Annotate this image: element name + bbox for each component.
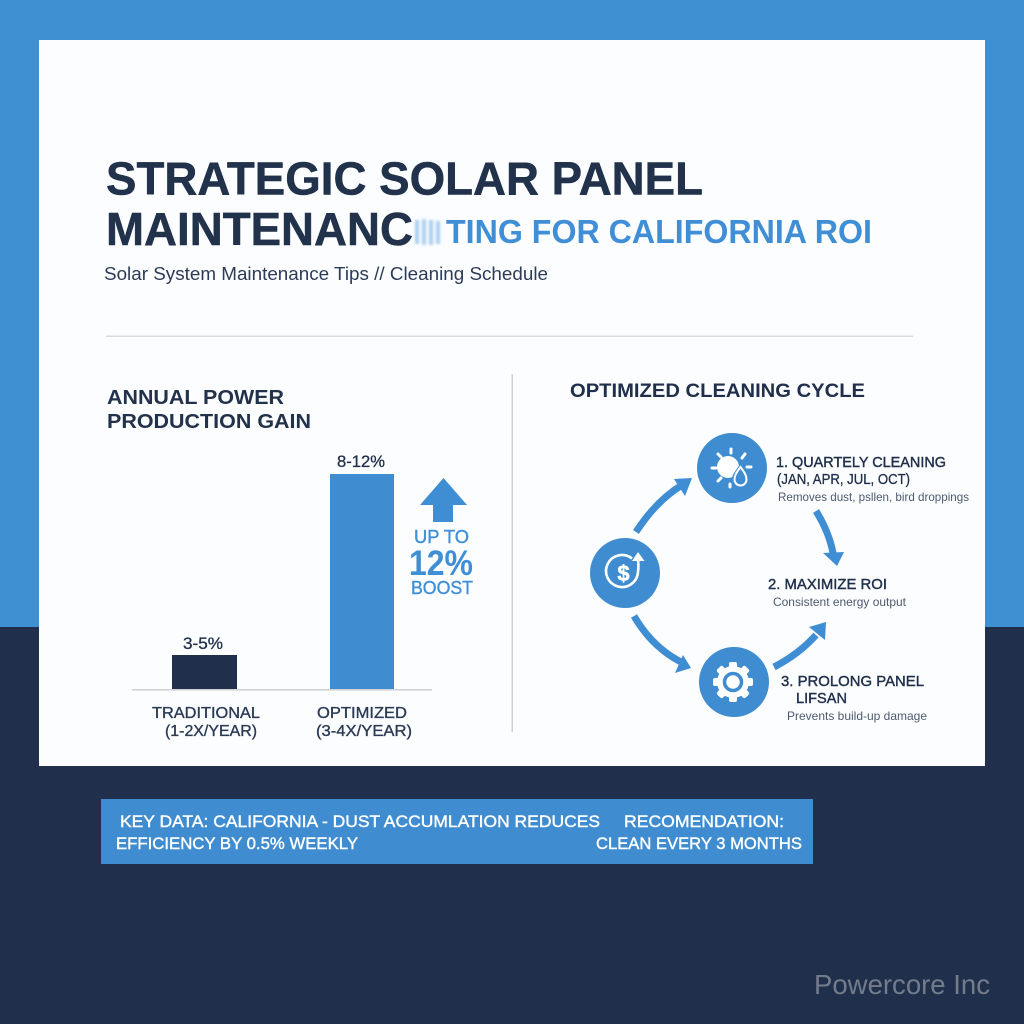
- text: step 1 quarterly cleaning: Removes dust, psllen, bird droppings: [778, 490, 969, 504]
- text: step 1 quarterly cleaning: 1. QUARTELY CLEANING: [776, 455, 946, 471]
- title: [106, 152, 872, 255]
- node: dollar growth: $: [617, 561, 630, 586]
- panel: optimized cleaning cycle: [570, 380, 969, 723]
- panel: white main card: [39, 40, 985, 766]
- callout: key data banner: [101, 799, 813, 864]
- value: 8-12%: 8-12%: [337, 452, 385, 471]
- node: dollar growth: [590, 538, 660, 608]
- node: sun and water drop: [697, 433, 767, 503]
- text: step 2 maximize ROI: Consistent energy output: [773, 595, 907, 609]
- panel: annual power production gain chart: [107, 387, 473, 740]
- text: recommendation: CLEAN EVERY 3 MONTHS: [596, 834, 802, 853]
- subtitle: Solar System Maintenance Tips // Cleaning Schedule: [104, 263, 548, 284]
- arrow: cleaning to ROI: [816, 511, 844, 566]
- arrow: money to lifespan: [634, 616, 691, 673]
- text: step 3 prolong panel lifespan: LIFSAN: [796, 691, 847, 707]
- axis label: traditional: (1-2X/YEAR): [165, 723, 257, 740]
- axis label: optimized: [316, 705, 412, 740]
- text: step 2 maximize ROI: [768, 577, 907, 609]
- axis label: optimized: OPTIMIZED: [317, 705, 407, 722]
- heading: annual power production gain: PRODUCTION GAIN: [107, 411, 311, 433]
- axis label: traditional: TRADITIONAL: [152, 705, 260, 722]
- title: STRATEGIC SOLAR PANEL: [106, 152, 703, 204]
- axis label: optimized: (3-4X/YEAR): [316, 723, 412, 740]
- text: step 2 maximize ROI: 2. MAXIMIZE ROI: [768, 577, 887, 593]
- callout: up to 12% boost: 12%: [409, 544, 473, 583]
- callout: up to 12% boost: BOOST: [411, 577, 473, 598]
- text: step 3 prolong panel lifespan: 3. PROLONG PANEL: [781, 674, 924, 690]
- bar: traditional: [172, 655, 237, 689]
- text: step 3 prolong panel lifespan: Prevents build-up damage: [787, 709, 927, 723]
- callout: up to 12% boost: UP TO: [414, 526, 469, 547]
- heading: optimized cleaning cycle: OPTIMIZED CLEANING CYCLE: [570, 380, 865, 402]
- callout: up to 12% boost: [409, 526, 473, 598]
- bar: optimized: [330, 474, 394, 689]
- text: step 1 quarterly cleaning: [776, 455, 969, 504]
- node: gear: [699, 647, 769, 717]
- text: recommendation: RECOMENDATION:: [624, 812, 784, 831]
- arrow: lifespan to ROI: [774, 622, 826, 667]
- icon: up arrow: [420, 478, 467, 522]
- arrow: money to cleaning: [636, 478, 692, 532]
- title: TING FOR CALIFORNIA ROI: [446, 213, 872, 250]
- heading: annual power production gain: [107, 387, 311, 433]
- title: MAINTENANC: [106, 203, 413, 255]
- watermark: Powercore Inc: Powercore Inc: [814, 969, 990, 1000]
- text: key data: EFFICIENCY BY 0.5% WEEKLY: [116, 834, 358, 853]
- heading: annual power production gain: ANNUAL POWER: [107, 387, 285, 409]
- text: key data: KEY DATA: CALIFORNIA - DUST ACCUMLATION REDUCES: [120, 812, 600, 831]
- text: step 3 prolong panel lifespan: [781, 674, 927, 723]
- background: blue upper band: [0, 0, 1024, 627]
- text: key data: [116, 812, 600, 853]
- background: navy lower band: [0, 627, 1024, 1024]
- value: 3-5%: 3-5%: [183, 634, 223, 653]
- axis label: traditional: [152, 705, 260, 740]
- text: recommendation: [596, 812, 802, 853]
- text: step 1 quarterly cleaning: (JAN, APR, JUL, OCT): [777, 472, 910, 488]
